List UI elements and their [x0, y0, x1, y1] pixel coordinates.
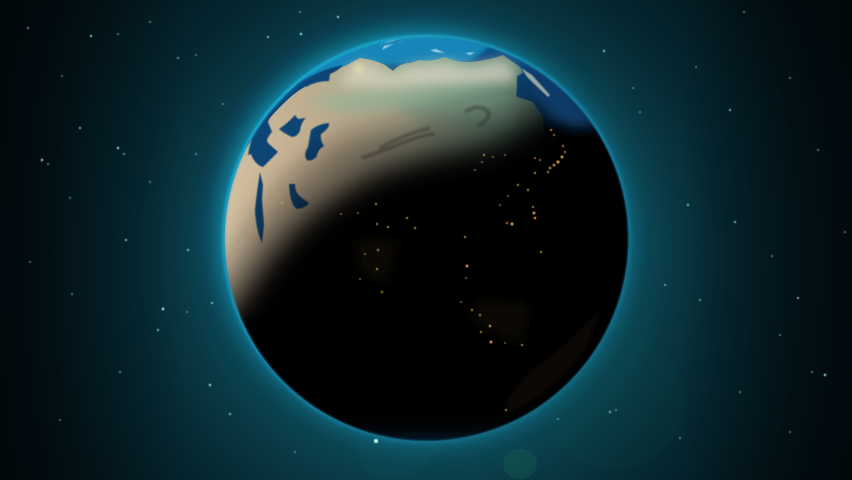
bright rim [224, 36, 630, 442]
Sea of Japan [516, 72, 529, 101]
lens flare [357, 330, 685, 479]
warm desert band [354, 110, 407, 132]
soft penumbra [225, 76, 550, 440]
arctic ice [378, 37, 475, 55]
lit landmass [214, 55, 545, 320]
Caspian sea [305, 123, 329, 160]
night side base [220, 34, 640, 444]
Persian gulf [289, 184, 309, 209]
glow on coast [352, 62, 364, 74]
pale northern land strip [340, 59, 516, 88]
Mediterranean sea [248, 108, 278, 167]
foreground star flare [374, 439, 378, 443]
dim continents [355, 240, 600, 412]
city lights [281, 129, 566, 411]
Red sea [255, 172, 264, 243]
Black sea [279, 115, 306, 137]
night shadow [230, 100, 628, 441]
atmosphere glow [190, 2, 661, 472]
eastern ocean [525, 62, 602, 128]
Japan sliver [521, 68, 550, 97]
arctic ocean [242, 38, 566, 441]
seas [248, 65, 550, 243]
Baltic sea [303, 65, 343, 87]
terrain ridges [362, 107, 489, 158]
earth globe [224, 37, 628, 441]
green tundra band [311, 86, 508, 116]
